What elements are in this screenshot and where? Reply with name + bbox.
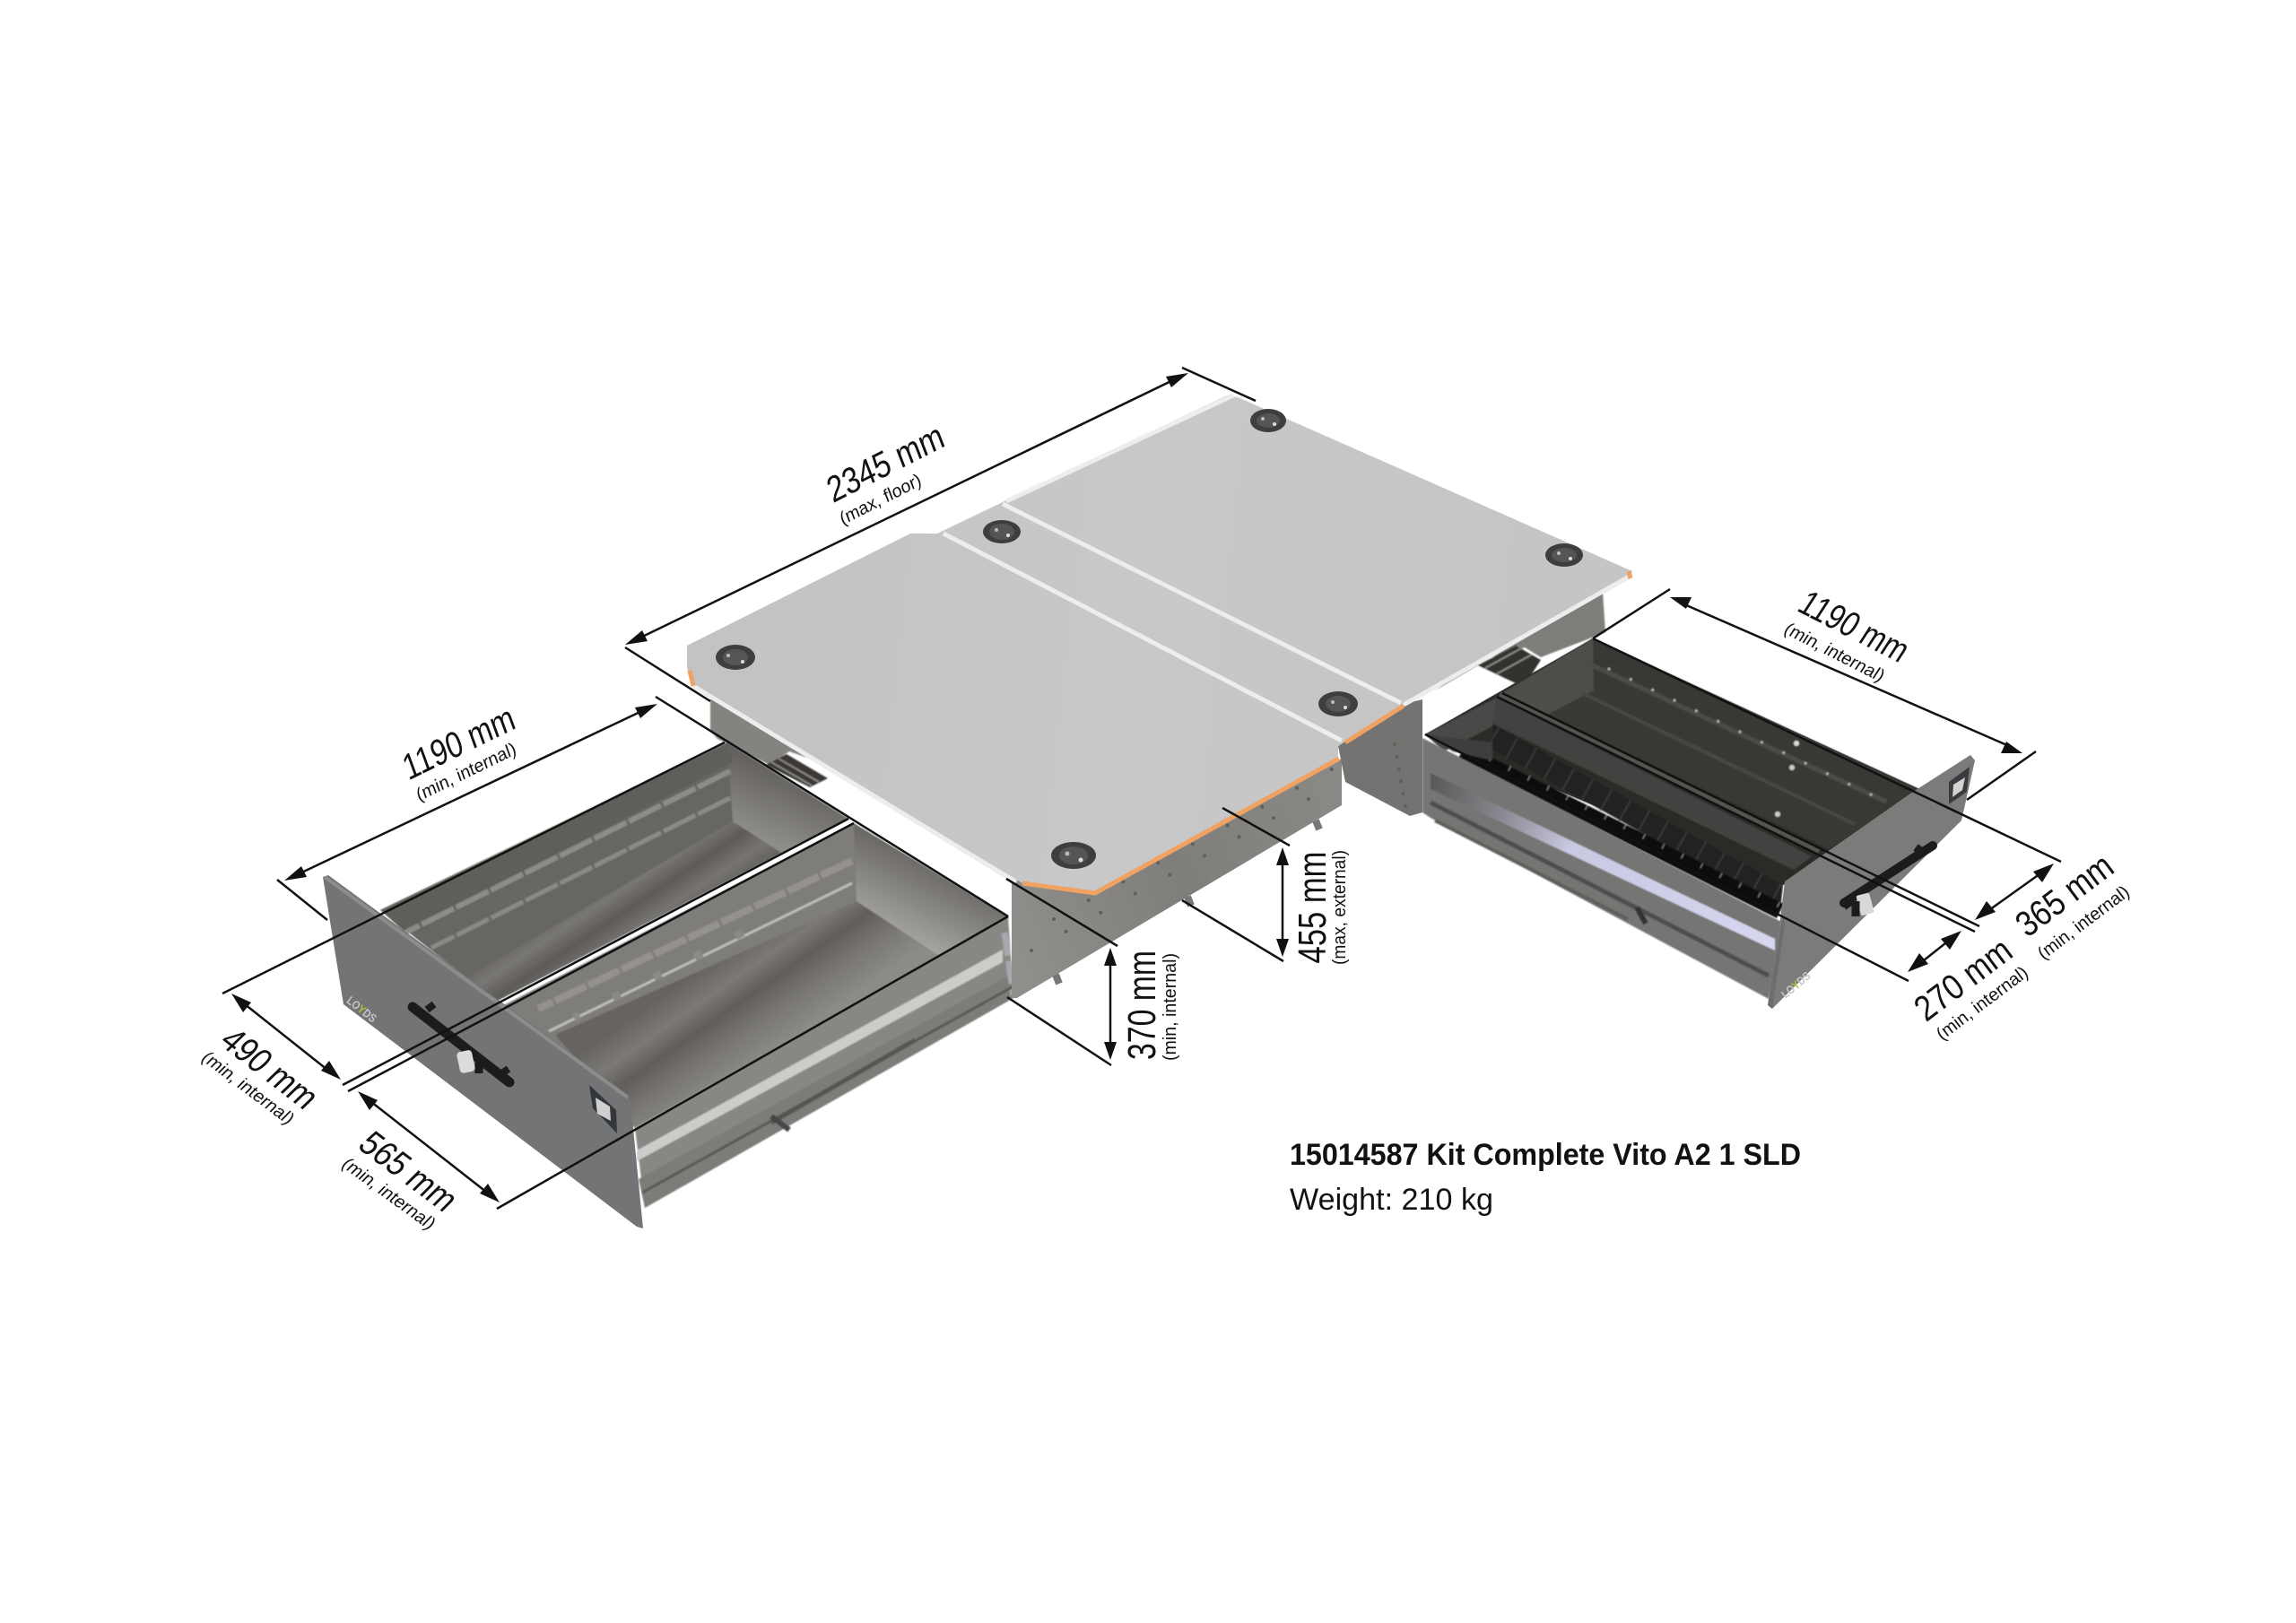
fastening disc 4 [1545, 543, 1583, 567]
left drawer side and runner [635, 916, 1013, 1208]
dimension: 1190 mm left drawer [277, 697, 1008, 920]
dimension: 565 mm left drawer compartment [337, 823, 1008, 1233]
dimension: 455 mm external height [1182, 808, 1350, 965]
dimension: 270 mm right drawer compartment [1425, 697, 2032, 1045]
fastening disc 6 [1051, 842, 1096, 869]
right drawer interior base [1425, 638, 1919, 885]
title: product name: 15014587 Kit Complete Vito A2 1 SLD [1290, 1138, 1801, 1172]
text: weight: Weight: 210 kg [1290, 1183, 1493, 1217]
central body [1012, 699, 1422, 998]
board orange edge [690, 571, 1631, 893]
dimension: 565 mm left drawer compartment: (min, internal) [337, 1155, 439, 1233]
dimension: 565 mm left drawer compartment: 565 mm [351, 1124, 466, 1219]
left drawer logo: LOYDS [344, 994, 379, 1025]
dimension: 490 mm left drawer compartment: (min, internal) [197, 1048, 299, 1128]
dimension: 455 mm external height: (max, external) [1330, 850, 1350, 965]
right drawer upper compartment [1502, 638, 1919, 849]
dimension: 1190 mm right drawer [1593, 584, 2036, 800]
dimension: 2345 mm floor: (max, floor) [837, 470, 924, 529]
dimension: 370 mm internal height [1006, 879, 1180, 1065]
dimension: 490 mm left drawer compartment [197, 742, 848, 1128]
left drawer front panel [323, 875, 643, 1228]
right drawer socket icon [1949, 767, 1970, 804]
dimension: 1190 mm right drawer: (min, internal) [1780, 620, 1889, 686]
fastening disc 1 [716, 645, 755, 670]
left drawer handle [413, 1004, 509, 1082]
dimension: 1190 mm left drawer: (min, internal) [413, 739, 519, 805]
dimension: 370 mm internal height: 370 mm [1120, 950, 1164, 1060]
top floor board [687, 395, 1632, 893]
left drawer upper compartment [380, 742, 848, 1002]
dimension: 1190 mm right drawer: 1190 mm [1791, 584, 1917, 670]
right drawer front panel [1768, 755, 1975, 1009]
fastening disc 5 [1318, 691, 1358, 716]
dimension: 270 mm right drawer compartment: (min, internal) [1933, 963, 2032, 1045]
fastening disc 2 [983, 520, 1021, 543]
right drawer [1422, 638, 1975, 1009]
rear rails and walls [710, 592, 1605, 787]
dimension: 270 mm right drawer compartment: 270 mm [1907, 931, 2020, 1029]
right drawer divider rod [1500, 695, 1819, 852]
dimension: 455 mm external height: 455 mm [1291, 852, 1335, 963]
fastening disc 3 [1250, 409, 1286, 432]
dimension: 2345 mm floor [625, 368, 1256, 701]
dimension: 1190 mm left drawer: 1190 mm [397, 698, 520, 788]
dimension: 370 mm internal height: (min, internal) [1161, 953, 1180, 1061]
dimension: 365 mm right drawer compartment [1502, 638, 2134, 964]
dimension: 2345 mm floor: 2345 mm [822, 416, 949, 511]
dimension: 365 mm right drawer compartment: (min, internal) [2034, 882, 2134, 964]
right drawer logo: LOYDS [1779, 968, 1813, 1001]
dimension: 365 mm right drawer compartment: 365 mm [2008, 846, 2121, 945]
board white edges [693, 395, 1631, 882]
right drawer handle [1843, 846, 1933, 916]
right drawer side and runner [1422, 738, 1785, 999]
dimension: 490 mm left drawer compartment: 490 mm [212, 1020, 327, 1116]
left drawer [323, 742, 1013, 1228]
left drawer lower compartment [502, 823, 1008, 1128]
left drawer socket icon [589, 1085, 617, 1133]
right drawer lower compartment [1425, 698, 1814, 911]
